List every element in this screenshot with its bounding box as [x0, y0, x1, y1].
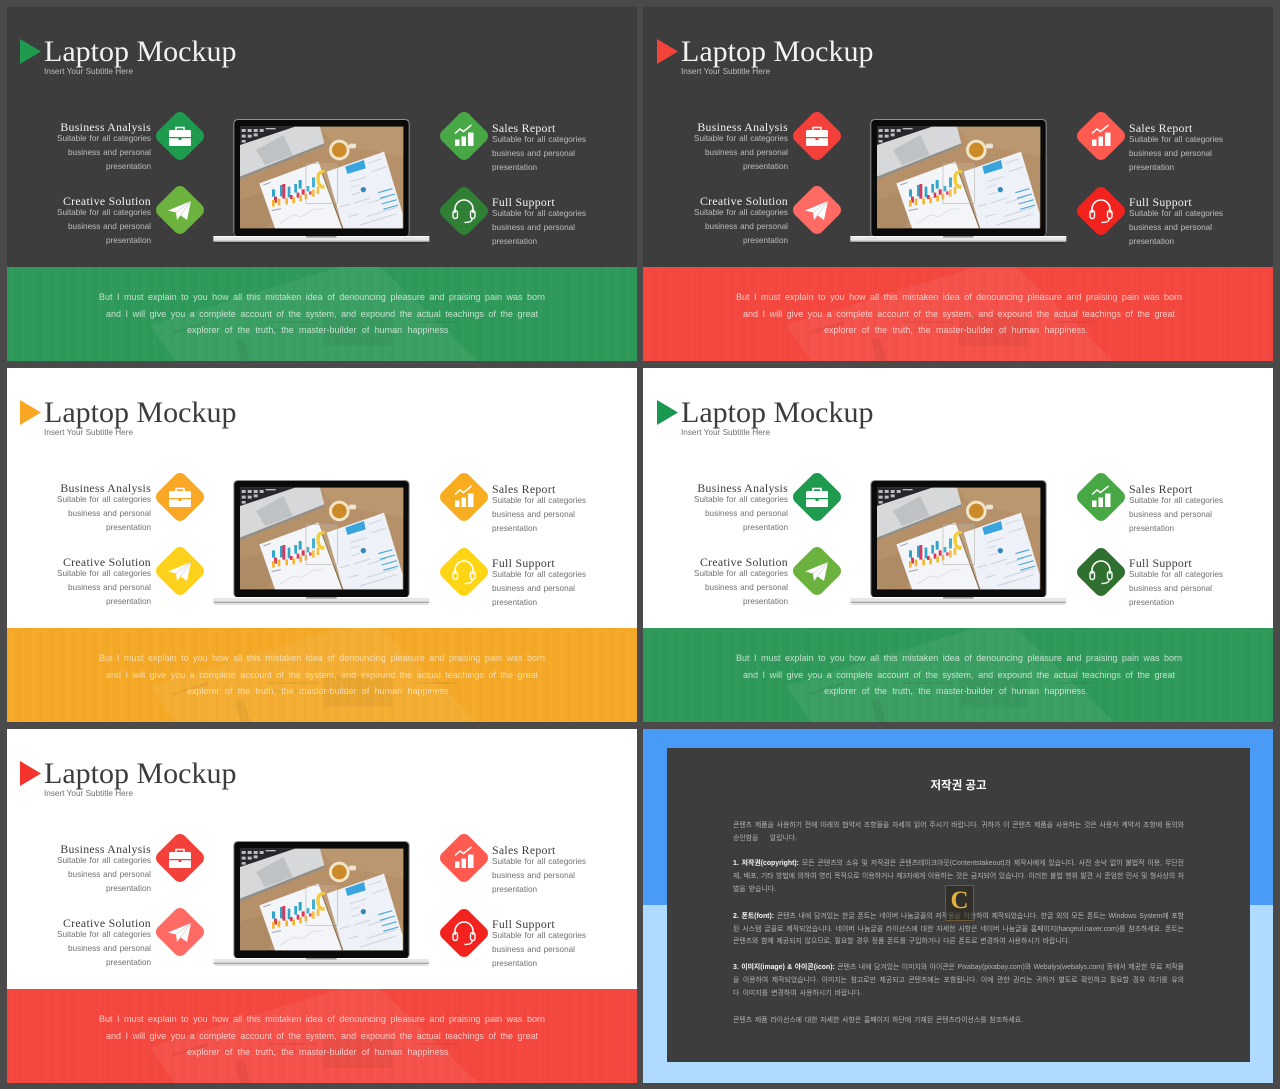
text block: Sales Report: presentation — [1129, 163, 1174, 172]
text block: Full Support — [492, 556, 586, 607]
text block: Sales Report: presentation — [492, 885, 537, 894]
text block: notice body: 콘텐츠와 함께 제공되지 않으므로, 필요할 경우 정품 폰트를 구입하거나 다른 폰트로 변경하여 사용하시기 바랍니다. — [733, 938, 1070, 945]
laptop mockup — [850, 480, 1066, 605]
text block: Creative Solution: Creative Solution — [63, 916, 151, 930]
icon: briefcase diamond — [156, 112, 204, 160]
text block: Business Analysis — [694, 120, 788, 171]
text block: Creative Solution: presentation — [106, 236, 151, 245]
text block: Full Support: Full Support — [492, 917, 555, 931]
text block: Full Support: Suitable for all categories — [1129, 209, 1223, 218]
text block: Creative Solution — [694, 555, 788, 606]
icon: paper plane diamond — [793, 186, 841, 234]
band: red with paragraph: But I must explain to you how all this mistaken idea of denouncing pleasure and praising pain was born — [736, 292, 1182, 302]
band: orange with paragraph: But I must explain to you how all this mistaken idea of denouncing pleasure and praising pain was born — [99, 653, 545, 663]
icon: paper plane diamond — [156, 547, 204, 595]
text block: Full Support: presentation — [492, 598, 537, 607]
text block: Sales Report — [1129, 121, 1223, 172]
text block: Sales Report: Sales Report — [1129, 482, 1193, 496]
text block: notice body: 재, 배포, 기타 방법에 의하여 영리 목적으로 이용하거나 제3자에게 이용하는 것은 금지되어 있습니다. 이러한 불법 행위 발견 시 준엄한 민사 및 형사상의 처 — [733, 873, 1184, 880]
text block: Full Support — [1129, 556, 1223, 607]
subtitle: Insert Your Subtitle Here — [681, 66, 770, 76]
text block: Sales Report: Suitable for all categories — [492, 857, 586, 866]
icon: chart diamond — [440, 473, 488, 521]
text block: Full Support: presentation — [1129, 237, 1174, 246]
band: green with paragraph: and I will give you a complete account of the system, and expound the actual teachings of the great — [743, 670, 1175, 680]
band: orange with paragraph: and I will give you a complete account of the system, and expound the actual teachings of the great — [106, 670, 538, 680]
text block: notice body: 1. 저작권(copyright): 모든 콘텐츠의 소유 및 저작권은 콘텐츠테이크아웃(Contentstakeout)과 제작사에게 있습니다. 사전 승낙 없이 불법적 이용, 무단전 — [733, 860, 1184, 867]
panel: white green slide — [643, 368, 1273, 722]
text block: notice body: 콘텐츠 제품 라이선스에 대한 자세한 사항은 홈페이지 하단에 기재된 콘텐츠라이선스를 참조하세요. — [733, 1017, 1023, 1024]
text block: Sales Report: business and personal — [492, 510, 575, 519]
band: red with paragraph — [643, 267, 1273, 361]
icon: briefcase diamond — [155, 833, 205, 883]
band: red with paragraph: explorer of the truth, the master-builder of human happiness. — [824, 325, 1088, 335]
text block: Creative Solution: business and personal — [68, 583, 151, 592]
icon: headset diamond — [1077, 548, 1125, 596]
subtitle: Insert Your Subtitle Here — [44, 788, 133, 798]
text block: Full Support: business and personal — [492, 223, 575, 232]
icon: briefcase diamond — [793, 473, 841, 521]
title: Laptop Mockup — [681, 35, 873, 68]
text block: Sales Report — [492, 482, 586, 533]
laptop mockup — [850, 119, 1066, 242]
text block: Creative Solution: presentation — [743, 236, 788, 245]
panel: copyright notice inner — [667, 748, 1250, 1062]
icon: briefcase diamond — [156, 473, 204, 521]
text block: Sales Report: business and personal — [1129, 149, 1212, 158]
text block: Creative Solution: Suitable for all categories — [57, 930, 151, 939]
text block: Creative Solution: presentation — [743, 597, 788, 606]
text block: Sales Report: business and personal — [492, 871, 575, 880]
band: orange with paragraph — [7, 628, 637, 722]
icon: headset diamond — [440, 187, 488, 235]
icon: title triangle — [20, 761, 41, 786]
text block: Sales Report: Suitable for all categories — [492, 496, 586, 505]
icon: headset diamond — [439, 908, 489, 958]
text block: Business Analysis: Suitable for all categories — [694, 495, 788, 504]
text block: Business Analysis — [57, 843, 151, 896]
text block: Full Support: Full Support — [1129, 556, 1192, 570]
text block: Full Support: Full Support — [1129, 195, 1192, 209]
text block: Creative Solution: business and personal — [705, 222, 788, 231]
text block: Business Analysis: business and personal — [68, 509, 151, 518]
text block: Sales Report: presentation — [492, 163, 537, 172]
text block: Sales Report: Sales Report — [492, 843, 556, 857]
laptop mockup — [213, 119, 430, 242]
band: green with paragraph — [7, 267, 637, 361]
text block: Business Analysis: Suitable for all categories — [57, 856, 151, 865]
band: green with paragraph: explorer of the truth, the master-builder of human happiness. — [824, 686, 1088, 696]
text block: Sales Report: business and personal — [492, 149, 575, 158]
text block: Sales Report — [492, 844, 586, 897]
text block: Full Support — [1129, 195, 1223, 246]
icon: paper plane diamond — [155, 907, 205, 957]
icon: gold C logo: C — [950, 887, 969, 914]
icon: chart diamond — [1077, 473, 1125, 521]
text block: Sales Report: Sales Report — [492, 121, 556, 135]
panel: white red slide — [7, 729, 637, 1083]
band: green with paragraph: But I must explain to you how all this mistaken idea of denouncing pleasure and praising pain was born — [736, 653, 1182, 663]
icon: headset diamond — [440, 548, 488, 596]
text block: Creative Solution: presentation — [106, 958, 151, 967]
band: green with paragraph: But I must explain to you how all this mistaken idea of denouncing pleasure and praising pain was born — [99, 292, 545, 302]
icon: chart diamond — [439, 833, 489, 883]
text block: Business Analysis: presentation — [106, 884, 151, 893]
text block: Business Analysis: Suitable for all categories — [57, 134, 151, 143]
band: red with paragraph: and I will give you a complete account of the system, and expound the actual teachings of the great — [743, 309, 1175, 319]
heading: copyright notice: 저작권 공고 — [930, 780, 987, 792]
text block: Creative Solution: business and personal — [68, 222, 151, 231]
text block: Business Analysis: presentation — [106, 523, 151, 532]
icon: headset diamond — [1077, 187, 1125, 235]
icon: chart diamond — [440, 112, 488, 160]
text block: Sales Report: Sales Report — [1129, 121, 1193, 135]
text block: Creative Solution: Suitable for all categories — [694, 569, 788, 578]
text block: Full Support: business and personal — [492, 584, 575, 593]
text block: Full Support: presentation — [1129, 598, 1174, 607]
text block: Sales Report: Suitable for all categories — [1129, 496, 1223, 505]
panel: white orange slide — [7, 368, 637, 722]
text block: Business Analysis — [57, 120, 151, 171]
subtitle: Insert Your Subtitle Here — [44, 428, 133, 436]
icon: title triangle — [657, 39, 678, 64]
text block: Sales Report — [492, 121, 586, 172]
subtitle: Insert Your Subtitle Here — [44, 66, 133, 76]
text block: Sales Report: Suitable for all categories — [492, 135, 586, 144]
text block: notice body: 콘텐츠 제품을 사용하기 전에 아래의 협약서 조항들을 자세히 읽어 주시기 바랍니다. 귀하가 이 콘텐츠 제품을 사용하는 것은 사용자 계약서 조항에 동의와 — [733, 822, 1184, 829]
text block: Business Analysis: Business Analysis — [60, 120, 151, 134]
text block: Sales Report: business and personal — [1129, 510, 1212, 519]
text block: Creative Solution: business and personal — [68, 944, 151, 953]
text block: Business Analysis: presentation — [106, 162, 151, 171]
title: Laptop Mockup — [681, 396, 873, 429]
text block: Business Analysis: Business Analysis — [697, 120, 788, 134]
text block: Business Analysis: Suitable for all categories — [694, 134, 788, 143]
text block: notice body: 된 시스템 글꼴로 제작되었습니다. 네이버 나눔글꼴 라이선스에 대한 자세한 사항은 네이버 나눔글꼴 홈페이지(hangeul.naver.com)를 참조하세요. 폰트는 — [733, 926, 1184, 933]
text block: Creative Solution: Creative Solution — [700, 555, 788, 569]
text block: Full Support — [492, 918, 586, 971]
icon: title triangle — [20, 400, 41, 425]
text block: notice body: 승인함을 알립니다. — [733, 835, 797, 842]
text block: Creative Solution — [57, 194, 151, 245]
text block: Creative Solution: Suitable for all categories — [694, 208, 788, 217]
text block: Sales Report: Suitable for all categories — [1129, 135, 1223, 144]
text block: Creative Solution — [694, 194, 788, 245]
text block: Business Analysis — [694, 481, 788, 532]
panel: dark green slide — [7, 7, 637, 361]
text block: Business Analysis — [57, 481, 151, 532]
band: green with paragraph — [643, 628, 1273, 722]
text block: notice body: 2. 폰트(font): 콘텐츠 내에 담겨있는 한글 폰트는 네이버 나눔글꼴의 저작물을 이용하여 제작되었습니다. 한글 외의 모든 폰트는 Windows System에 포함 — [733, 913, 1184, 920]
title: Laptop Mockup — [44, 35, 236, 68]
panel: dark red slide — [643, 7, 1273, 361]
title: Laptop Mockup — [44, 396, 236, 429]
icon: paper plane diamond — [793, 547, 841, 595]
title: Laptop Mockup — [44, 757, 236, 790]
band: green with paragraph: and I will give you a complete account of the system, and expound the actual teachings of the great — [106, 309, 538, 319]
text block: Creative Solution: Suitable for all categories — [57, 208, 151, 217]
text block: Full Support: Suitable for all categories — [492, 209, 586, 218]
text block: Creative Solution: presentation — [106, 597, 151, 606]
text block: Sales Report: presentation — [1129, 524, 1174, 533]
text block: notice body: 3. 이미지(image) & 아이콘(icon): 콘텐츠 내에 담겨있는 이미지와 아이콘은 Pixabay(pixabay.com)와 Webalys(webalys.com) 등에서 제공한 무료 저작물 — [733, 964, 1184, 971]
text block: Business Analysis: presentation — [743, 162, 788, 171]
text block: Business Analysis: business and personal — [705, 509, 788, 518]
text block: Creative Solution — [57, 917, 151, 970]
text block: Creative Solution: Creative Solution — [63, 555, 151, 569]
icon: briefcase diamond — [793, 112, 841, 160]
text block: Full Support: Full Support — [492, 195, 555, 209]
text block: Business Analysis: business and personal — [68, 870, 151, 879]
text block: Sales Report — [1129, 482, 1223, 533]
text block: Business Analysis: Business Analysis — [60, 481, 151, 495]
text block: Creative Solution: Creative Solution — [700, 194, 788, 208]
band: red with paragraph: explorer of the truth, the master-builder of human happiness. — [187, 1047, 451, 1057]
text block: Full Support: presentation — [492, 959, 537, 968]
text block: Full Support — [492, 195, 586, 246]
text block: Business Analysis: Suitable for all categories — [57, 495, 151, 504]
text block: notice body: 을 이용하여 제작되었습니다. 이미지는 참고로만 제공되고 콘텐츠에는 포함됩니다. 이에 관한 권리는 귀하가 별도로 확인하고 필요할 경우 여기를 유의 — [733, 977, 1184, 984]
laptop mockup — [213, 480, 430, 605]
text block: Full Support: Suitable for all categories — [492, 931, 586, 940]
text block: Business Analysis: business and personal — [68, 148, 151, 157]
band: red with paragraph — [7, 989, 637, 1083]
band: red with paragraph: and I will give you a complete account of the system, and expound the actual teachings of the great — [106, 1031, 538, 1041]
text block: Full Support: business and personal — [1129, 223, 1212, 232]
text block: Business Analysis: business and personal — [705, 148, 788, 157]
text block: Full Support: Full Support — [492, 556, 555, 570]
laptop mockup — [200, 822, 440, 982]
text block: Creative Solution: Suitable for all categories — [57, 569, 151, 578]
text block: notice body: 벌을 받습니다. — [733, 886, 776, 893]
band: green with paragraph: explorer of the truth, the master-builder of human happiness. — [187, 325, 451, 335]
text block: Full Support: business and personal — [1129, 584, 1212, 593]
text block: Creative Solution: business and personal — [705, 583, 788, 592]
text block: Sales Report: presentation — [492, 524, 537, 533]
text block: Business Analysis: presentation — [743, 523, 788, 532]
panel: copyright notice background — [643, 729, 1273, 1083]
text block: notice body: 다 이미지를 변경하여 사용하시기 바랍니다. — [733, 990, 862, 997]
band: red with paragraph: But I must explain to you how all this mistaken idea of denouncing pleasure and praising pain was born — [99, 1014, 545, 1024]
icon: gold C logo — [945, 885, 974, 921]
icon: title triangle — [657, 400, 678, 425]
text block: Business Analysis: Business Analysis — [60, 842, 151, 856]
icon: title triangle — [20, 39, 41, 64]
text block: Business Analysis: Business Analysis — [697, 481, 788, 495]
icon: chart diamond — [1077, 112, 1125, 160]
band: orange with paragraph: explorer of the truth, the master-builder of human happiness. — [187, 686, 451, 696]
text block: Full Support: Suitable for all categories — [492, 570, 586, 579]
text block: Full Support: Suitable for all categories — [1129, 570, 1223, 579]
text block: Creative Solution: Creative Solution — [63, 194, 151, 208]
text block: Sales Report: Sales Report — [492, 482, 556, 496]
icon: paper plane diamond — [156, 186, 204, 234]
subtitle: Insert Your Subtitle Here — [681, 428, 770, 436]
text block: Creative Solution — [57, 555, 151, 606]
text block: Full Support: business and personal — [492, 945, 575, 954]
text block: Full Support: presentation — [492, 237, 537, 246]
